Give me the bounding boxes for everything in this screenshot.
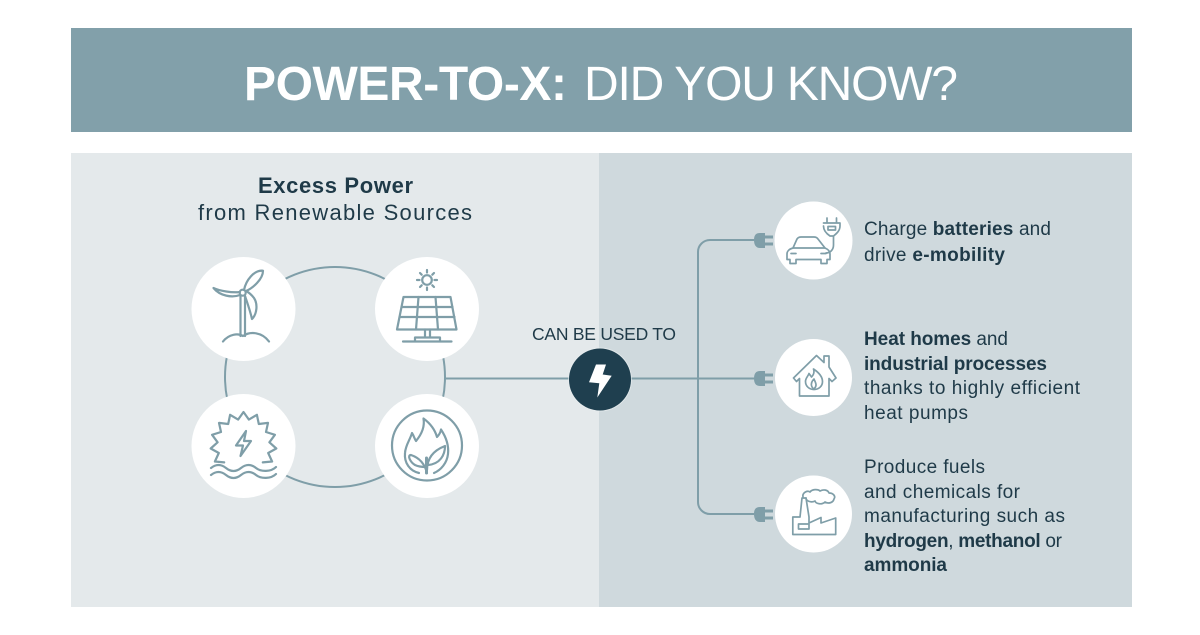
icon: house with flame: [775, 339, 852, 416]
panel: renewable sources: [71, 153, 599, 607]
text: batteries and e-mobility: [864, 219, 1051, 266]
text: fuels and chemicals: Produce fuels: [864, 457, 985, 478]
text: heat homes: thanks to highly efficient: [864, 378, 1081, 399]
title banner: [71, 28, 1132, 132]
panel: uses: [599, 153, 1132, 607]
text: heat homes: [864, 329, 1081, 424]
connector line: sources to uses: [445, 378, 754, 380]
text: heat homes: Heat homes and: [864, 329, 1008, 350]
text: fuels and chemicals: manufacturing such as: [864, 506, 1065, 527]
heading: excess power: Excess Power: [258, 173, 413, 198]
label: can be used to: CAN BE USED TO: [532, 324, 676, 344]
text: heat homes: heat pumps: [864, 403, 968, 424]
text: fuels and chemicals: [864, 457, 1065, 576]
text: fuels and chemicals: and chemicals for: [864, 482, 1021, 503]
text: fuels and chemicals: hydrogen, methanol or: [864, 531, 1063, 552]
icon: solar panel: [375, 257, 479, 361]
icon: electric car: [774, 202, 852, 280]
text: batteries and e-mobility: Charge batteries and: [864, 219, 1051, 240]
plug: e-mobility: [754, 233, 773, 248]
icon: wind turbine: [192, 257, 296, 361]
plug: heat: [754, 371, 773, 386]
title banner: POWER-TO-X:: [244, 58, 567, 111]
text: fuels and chemicals: ammonia: [864, 555, 947, 576]
icon: hydro wheel and waves: [192, 394, 296, 498]
ring connecting sources: [225, 267, 445, 487]
title banner: DID YOU KNOW?: [584, 58, 958, 111]
icon: factory: [775, 476, 852, 552]
icon: lightning bolt badge: [568, 348, 632, 412]
plug: fuels: [754, 507, 773, 522]
heading: excess power: [198, 173, 472, 225]
heading: excess power: from Renewable Sources: [198, 200, 472, 225]
text: heat homes: industrial processes: [864, 354, 1047, 375]
branching connector: [698, 240, 754, 514]
icon: biomass flame and leaves: [375, 394, 479, 498]
text: batteries and e-mobility: drive e-mobility: [864, 245, 1005, 266]
